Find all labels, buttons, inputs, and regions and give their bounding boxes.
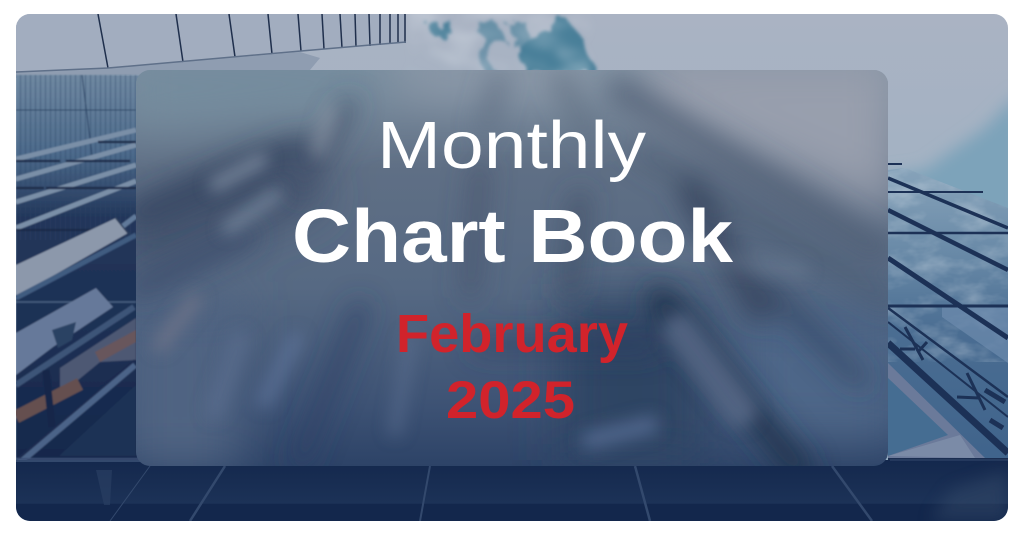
date: February: February [396, 304, 628, 364]
bottom floor band [16, 460, 1008, 522]
right glass facade [888, 160, 1008, 467]
heading: Chart Book: Chart Book [292, 194, 733, 278]
panel blurred streaks [136, 78, 888, 470]
left facade with beams [16, 75, 141, 470]
upper left facade band [16, 14, 406, 78]
frosted blurred glass panel [120, 50, 900, 470]
panel blurred tones [120, 50, 900, 470]
date: 2025: 2025 [446, 371, 575, 430]
heading: Monthly: Monthly [377, 108, 647, 183]
panel blurred highlights [160, 110, 800, 440]
title text [292, 108, 733, 430]
clouds [400, 6, 1020, 250]
